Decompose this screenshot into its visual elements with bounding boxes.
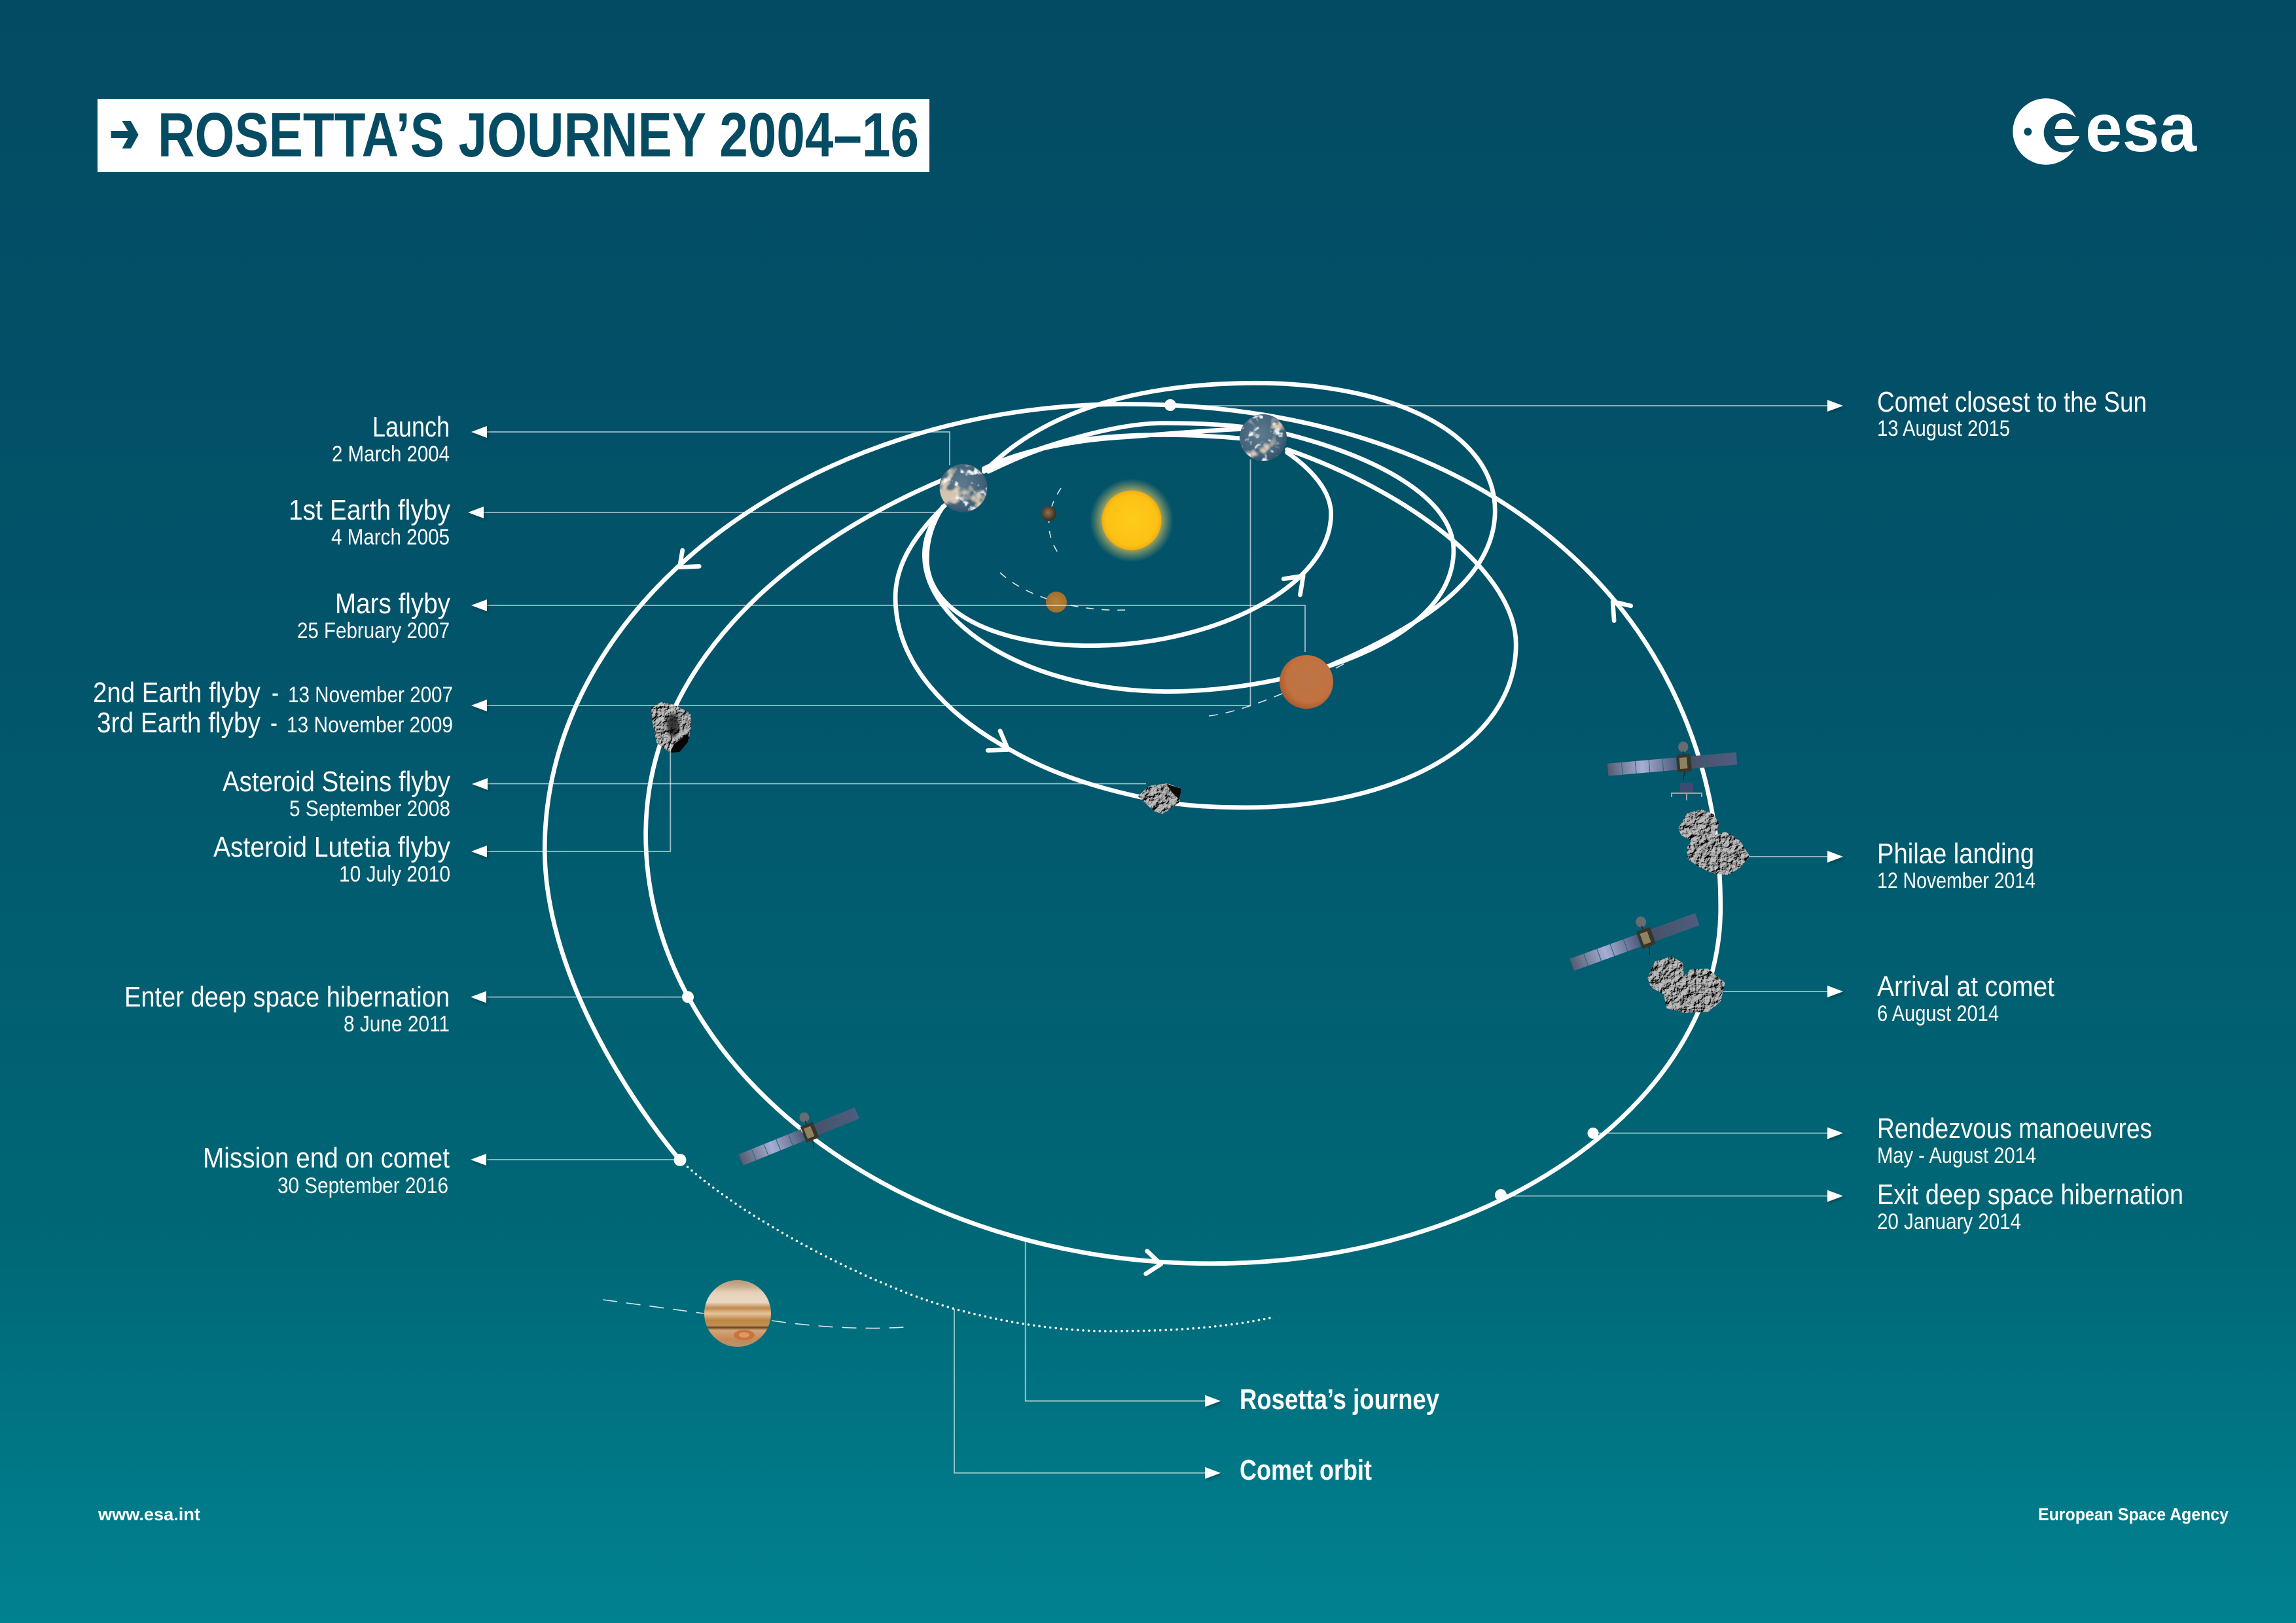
label: Asteroid Steins flyby: Asteroid Steins flyby <box>223 766 450 798</box>
marker: mission end <box>674 1154 686 1166</box>
icon: Sun <box>1090 478 1174 562</box>
leader: comet orbit <box>954 1309 1205 1473</box>
arrow: Steins loop <box>988 731 1008 751</box>
arrow: comet orbit <box>1205 1467 1221 1479</box>
icon: asteroid Lutetia <box>651 702 691 753</box>
label: Asteroid Steins flyby <box>223 766 450 821</box>
label: Mission end on comet <box>203 1142 450 1198</box>
spacecraft: releasing Philae <box>1606 737 1738 800</box>
label: 3rd Earth flyby: 3rd Earth flyby <box>97 707 260 739</box>
arrow: Rosetta's journey <box>1205 1395 1221 1407</box>
orbit: upper loop to Mars <box>984 383 1495 673</box>
spacecraft: on journey <box>733 1094 863 1175</box>
label: Exit deep space hibernation: Exit deep space hibernation <box>1877 1179 2183 1211</box>
leader: Mars flyby <box>487 605 1305 652</box>
label: Rendezvous manoeuvres <box>1877 1113 2152 1168</box>
label: Asteroid Lutetia flyby: 10 July 2010 <box>339 862 450 887</box>
logo: esa: esa <box>2085 90 2197 166</box>
icon: Philae lander <box>1672 783 1702 800</box>
Rosetta's trajectory <box>545 383 1721 1274</box>
icon: title arrow <box>111 121 139 149</box>
leader: Steins flyby <box>488 783 1146 784</box>
arrow: bottom <box>1146 1251 1161 1274</box>
orbit: Mercury <box>1049 488 1061 554</box>
leader: enter hibernation <box>487 996 688 997</box>
title: ROSETTA’S JOURNEY 2004–16 <box>158 100 919 170</box>
label: 3rd Earth flyby: 13 November 2009 <box>287 713 453 738</box>
leader: second and third Earth flyby <box>487 459 1250 705</box>
orbit: Mars <box>1209 660 1352 716</box>
arrow: arrival <box>1827 986 1843 997</box>
arrow: exit hibernation <box>1827 1190 1843 1202</box>
marker: exit hibernation <box>1495 1189 1507 1201</box>
footer: website: www.esa.int <box>98 1505 200 1524</box>
icon: Earth at second position <box>1240 414 1287 461</box>
icon: asteroid Steins <box>1138 783 1181 814</box>
label: Enter deep space hibernation <box>124 981 450 1037</box>
spacecraft: at arrival <box>1564 899 1703 981</box>
icon: Venus <box>1046 592 1067 613</box>
label: Asteroid Lutetia flyby <box>213 831 450 887</box>
label: Launch: 2 March 2004 <box>332 442 450 467</box>
leader: exit hibernation <box>1501 1195 1827 1196</box>
logo: esa <box>2013 90 2197 166</box>
label: Philae landing: Philae landing <box>1877 838 2034 870</box>
leader: Rosetta's journey <box>1026 1240 1205 1401</box>
orbit: second loop via Mars <box>924 423 1454 692</box>
label: 1st Earth flyby: 4 March 2005 <box>331 525 450 550</box>
label: Enter deep space hibernation: 8 June 2011 <box>344 1012 450 1037</box>
label: Arrival at comet: 6 August 2014 <box>1877 1001 1999 1026</box>
label: Comet closest to the Sun: 13 August 2015 <box>1877 416 2010 441</box>
legend: Comet orbit: Comet orbit <box>1240 1454 1372 1486</box>
label: Mission end on comet: Mission end on comet <box>203 1142 450 1174</box>
orbit: Venus <box>1000 573 1126 610</box>
arrow: rendezvous <box>1827 1127 1843 1139</box>
label: 2nd Earth flyby: 13 November 2007 <box>288 683 453 707</box>
orbit: Jupiter <box>603 1300 904 1329</box>
arrow: launch <box>471 426 487 438</box>
orbit: Steins loop <box>895 450 1516 808</box>
arrow: outer left <box>679 550 699 567</box>
label: Comet closest to the Sun <box>1877 386 2147 441</box>
legend: Rosetta's journey: Rosetta’s journey <box>1240 1383 1439 1416</box>
label: 1st Earth flyby: 1st Earth flyby <box>289 494 450 526</box>
label: Enter deep space hibernation: Enter deep space hibernation <box>124 981 450 1013</box>
label: Mars flyby <box>297 588 450 643</box>
arrow: first Earth flyby <box>468 507 484 518</box>
leader lines <box>483 406 1827 1473</box>
icon: Mars <box>1280 655 1333 709</box>
marker: enter hibernation <box>682 991 694 1003</box>
arrow: Lutetia <box>471 846 487 857</box>
leader: first Earth flyby <box>483 512 938 513</box>
dashed planet orbits <box>603 488 1352 1329</box>
marker: comet closest to Sun <box>1164 399 1176 411</box>
leader: rendezvous <box>1593 1132 1827 1133</box>
arrow: Mars <box>471 599 487 611</box>
label: Rendezvous manoeuvres: May - August 2014 <box>1877 1143 2036 1168</box>
label: 1st Earth flyby <box>289 494 450 550</box>
label: Mission end on comet: 30 September 2016 <box>278 1173 448 1198</box>
leader: arrival <box>1723 991 1827 992</box>
orbit: first loop <box>927 452 1331 646</box>
label: 2nd Earth flyby <box>93 677 453 709</box>
label: Exit deep space hibernation <box>1877 1179 2183 1234</box>
arrow: mission end <box>471 1154 486 1166</box>
label: 3rd Earth flyby <box>97 707 453 739</box>
label: Philae landing: 12 November 2014 <box>1877 868 2036 893</box>
arrow: Earth flybys <box>471 700 487 711</box>
orbit: link between Earth positions <box>984 429 1242 471</box>
label: Arrival at comet <box>1877 971 2054 1026</box>
icon: Jupiter <box>704 1280 771 1347</box>
label: Mars flyby: 25 February 2007 <box>297 618 450 643</box>
leader: Lutetia flyby <box>487 744 670 851</box>
icon: Mercury <box>1041 506 1056 521</box>
label: Philae landing <box>1877 838 2036 893</box>
icon: comet at arrival <box>1647 956 1725 1013</box>
leader: Philae <box>1749 856 1827 857</box>
label: Launch <box>332 411 450 467</box>
leader: mission end <box>487 1159 680 1160</box>
arrow: outer right <box>1613 601 1631 620</box>
label: 2nd Earth flyby: 2nd Earth flyby <box>93 677 260 709</box>
label: Asteroid Lutetia flyby: Asteroid Lutetia flyby <box>213 831 450 863</box>
arrow: Philae <box>1827 851 1843 863</box>
leader: comet closest <box>1170 405 1827 406</box>
orbit event markers <box>674 399 1598 1201</box>
label: Arrival at comet: Arrival at comet <box>1877 971 2054 1003</box>
icon: comet at Philae landing <box>1678 810 1750 875</box>
orbit: final large spiral to comet <box>545 404 1721 1264</box>
arrow: inner loop <box>1283 576 1303 595</box>
footer: agency: European Space Agency <box>2038 1505 2229 1524</box>
label: Launch: Launch <box>372 411 450 443</box>
arrow: comet closest <box>1827 400 1843 412</box>
comet orbit dotted line <box>679 1160 1271 1331</box>
label: Asteroid Steins flyby: 5 September 2008 <box>289 796 450 821</box>
leader: launch <box>487 432 950 465</box>
label: 3rd Earth flyby: - <box>270 707 278 739</box>
label: Exit deep space hibernation: 20 January 2014 <box>1877 1209 2021 1234</box>
marker: rendezvous <box>1588 1128 1598 1139</box>
label: 2nd Earth flyby: - <box>272 677 279 709</box>
icon: Earth at launch position <box>939 464 988 512</box>
label: Comet closest to the Sun: Comet closest to the Sun <box>1877 386 2147 418</box>
arrow: hibernation <box>471 991 486 1003</box>
arrowheads <box>468 400 1843 1479</box>
arrow: Steins <box>472 778 488 790</box>
label: Rendezvous manoeuvres: Rendezvous manoeuvres <box>1877 1113 2152 1145</box>
label: Mars flyby: Mars flyby <box>335 588 450 620</box>
